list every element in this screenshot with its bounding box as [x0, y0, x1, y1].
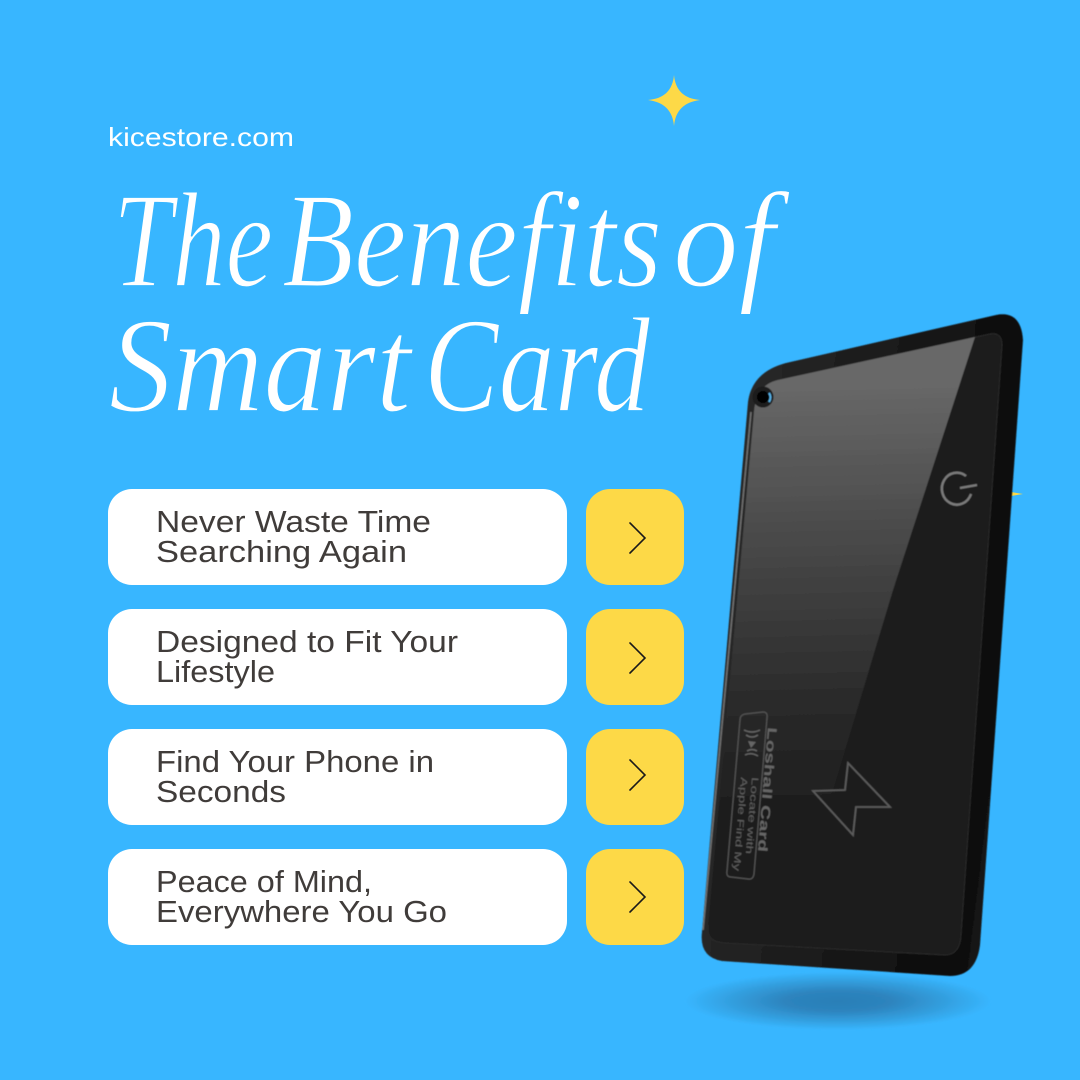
icon: power symbol: [942, 473, 977, 505]
title: [109, 166, 791, 441]
benefit row 2: Lifestyle: [156, 655, 275, 689]
benefit row 4: [108, 849, 567, 945]
benefit row 3: [108, 729, 567, 825]
camera hole: [752, 386, 774, 408]
card shadow: [685, 972, 991, 1030]
benefit row 1: [108, 489, 567, 585]
arrow button 1: [586, 489, 684, 585]
title: Benefits: [282, 166, 662, 316]
card body: [702, 314, 1023, 976]
card left edge highlight: [703, 412, 751, 930]
card brand label: Loshall Card: [755, 727, 780, 853]
arrow button 3: [586, 729, 684, 825]
benefit row 4: Peace of Mind,: [156, 865, 372, 899]
find my badge: Locate with: [743, 777, 760, 854]
find my badge: Apple Find My: [730, 777, 749, 872]
benefit row 2: [108, 609, 567, 705]
icon: yellow sparkle: [648, 75, 700, 126]
benefit row 1: Never Waste Time: [156, 505, 431, 539]
title: of: [673, 166, 791, 316]
title: The: [113, 166, 273, 316]
find my badge: [727, 712, 767, 879]
benefit row 3: Find Your Phone in: [156, 745, 434, 779]
arrow button 2: [586, 609, 684, 705]
card glare: [708, 337, 975, 925]
benefit row 1: Searching Again: [156, 535, 407, 569]
icon: small sparkle tip behind card: [1005, 491, 1023, 497]
title: Card: [424, 291, 651, 441]
title: Smart: [109, 291, 414, 441]
website label: kicestore.com: [108, 122, 294, 152]
benefit row 4: Everywhere You Go: [156, 895, 447, 929]
icon: lightning logo: [813, 763, 890, 835]
benefit row 2: Designed to Fit Your: [156, 625, 458, 659]
smart card device: [702, 314, 1023, 976]
arrow button 4: [586, 849, 684, 945]
benefit row 3: Seconds: [156, 775, 286, 809]
card face: [708, 334, 1002, 955]
